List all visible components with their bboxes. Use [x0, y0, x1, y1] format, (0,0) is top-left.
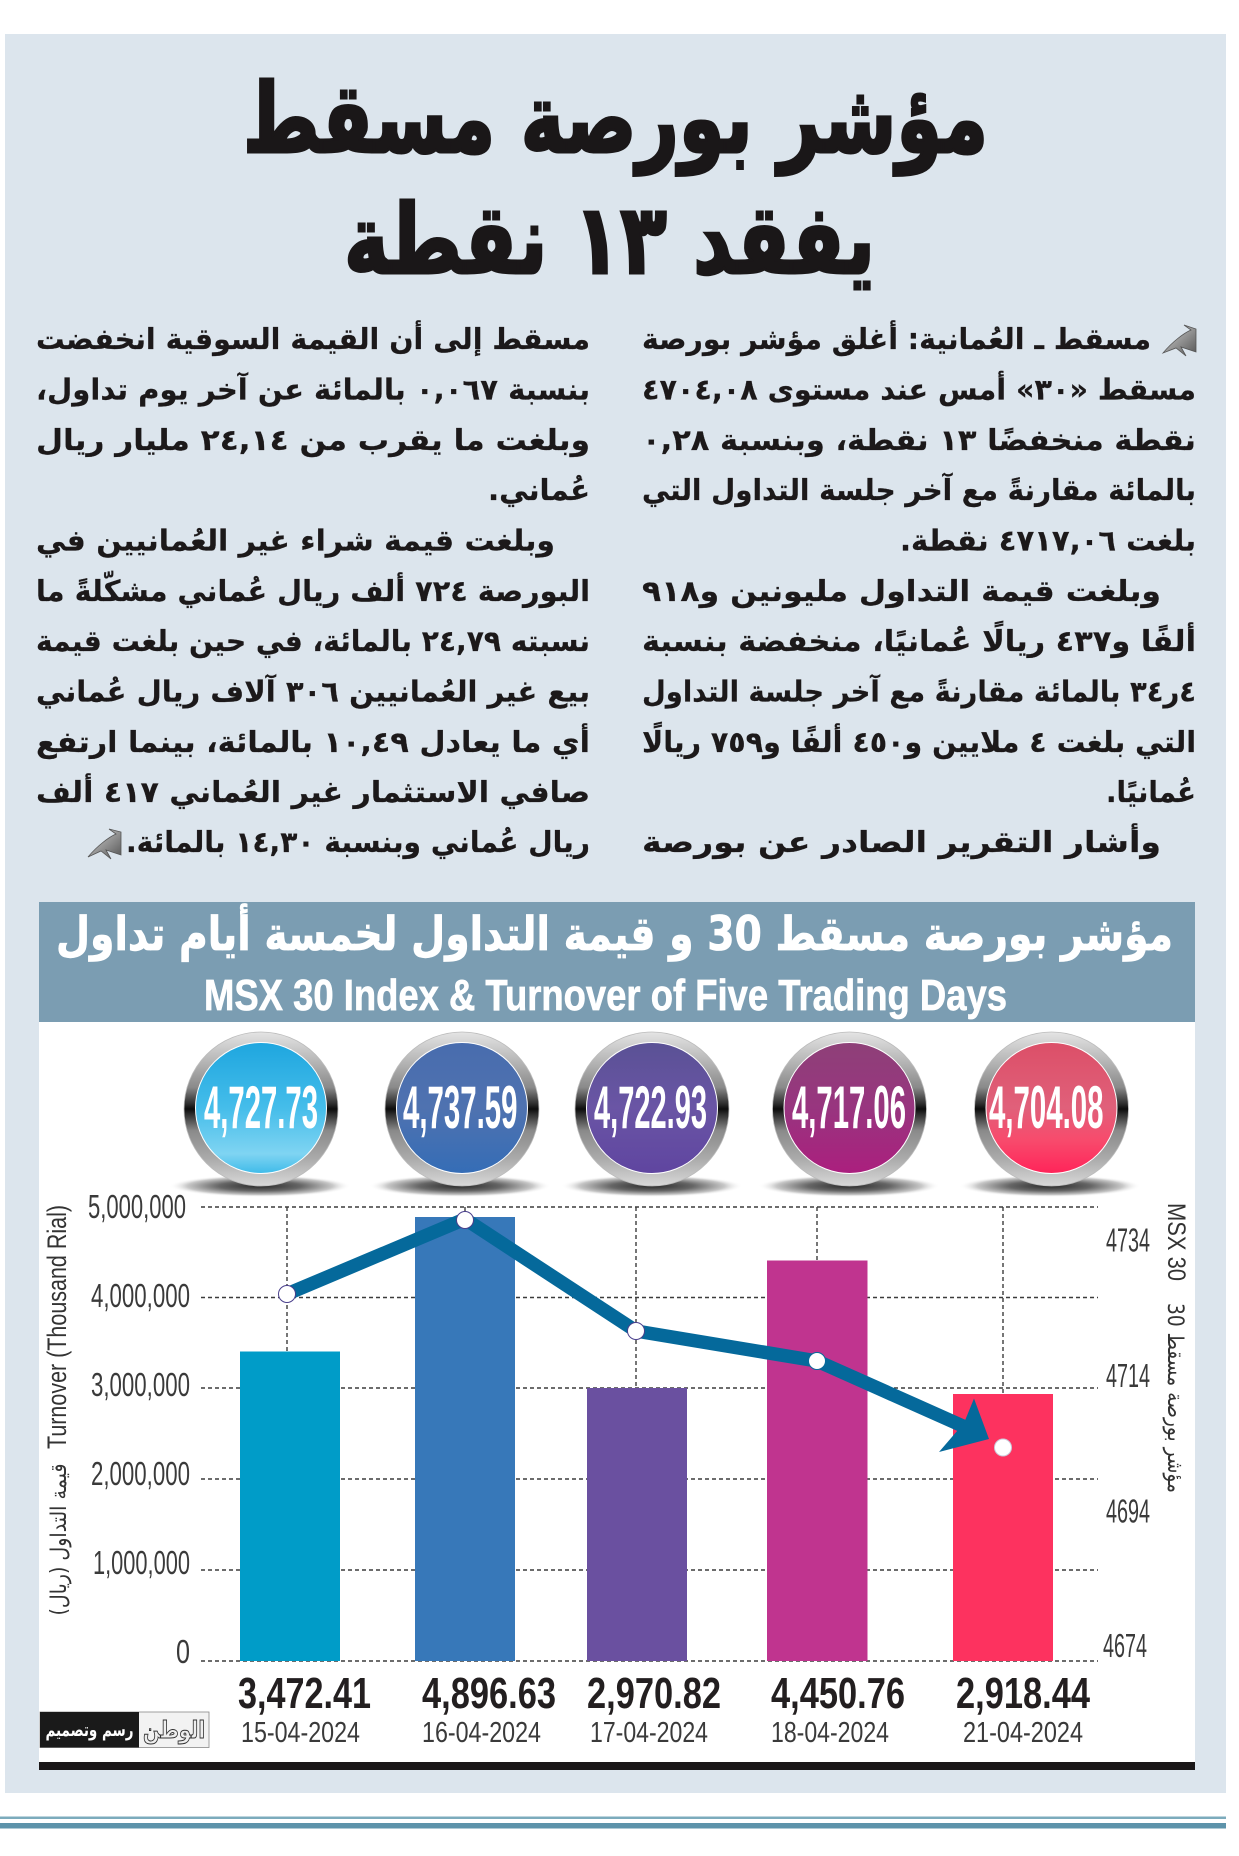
- text column: left: صافي الاستثمار غير العُماني ٤١٧ ألف: [36, 773, 590, 809]
- badge: 21-04-2024: [959, 1032, 1141, 1197]
- text column: right: بالمائة مقارنةً مع آخر جلسة التداول التي: [642, 472, 1196, 507]
- badge: 21-04-2024: 4,704.08: [989, 1074, 1104, 1141]
- text column: left: البورصة ٧٢٤ ألف ريال عُماني مشكّلةً ما: [36, 571, 590, 608]
- right axis title: مؤشر بورصة مسقط 30: [1162, 1303, 1187, 1493]
- right axis labels: 4674: [1103, 1627, 1147, 1664]
- text column: right: بلغت ٤٧١٧,٠٦ نقطة.: [900, 524, 1196, 558]
- left axis labels: 5,000,000: [88, 1188, 186, 1225]
- turnover values: 2,970.82: [587, 1669, 721, 1718]
- left axis labels: [88, 1188, 190, 1670]
- text column: right: التي بلغت ٤ ملايين و٤٥٠ ألفًا و٧٥٩ ريالًا: [642, 722, 1196, 759]
- dates: [241, 1717, 1083, 1749]
- title: مؤشر بورصة مسقط: [243, 63, 988, 176]
- text column: left: [36, 320, 590, 859]
- panel: chart header: مؤشر بورصة مسقط 30 و قيمة التداول لخمسة أيام تداول: [56, 903, 1173, 962]
- left axis labels: 0: [176, 1633, 190, 1670]
- logo credit: الوطن: [143, 1716, 205, 1744]
- dates: 18-04-2024: [771, 1717, 889, 1749]
- dates: 21-04-2024: [963, 1717, 1083, 1749]
- title: يفقد ١٣ نقطة: [344, 184, 875, 296]
- text column: left: ريال عُماني وبنسبة ١٤,٣٠ بالمائة.: [126, 825, 590, 859]
- text column: right: [642, 320, 1196, 859]
- left axis labels: 1,000,000: [93, 1544, 190, 1581]
- dates: 17-04-2024: [590, 1717, 708, 1749]
- turnover values: 3,472.41: [238, 1669, 371, 1718]
- text column: right: ألفًا و٤٣٧ ريالًا عُمانيًا، منخفضة بنسبة: [642, 621, 1196, 658]
- footer double rule: [0, 1816, 1226, 1828]
- text column: left: مسقط إلى أن القيمة السوقية انخفضت: [36, 320, 590, 357]
- badge: 17-04-2024: 4,722.93: [594, 1074, 707, 1141]
- bars: [240, 1217, 1053, 1661]
- index badges: [169, 1032, 1141, 1197]
- text column: left: عُماني.: [488, 473, 590, 507]
- text column: left: أي ما يعادل ١٠,٤٩ بالمائة، بينما ارتفع: [36, 723, 590, 759]
- logo credit: رسم وتصميم: [46, 1720, 134, 1741]
- badge: 15-04-2024: 4,727.73: [204, 1074, 318, 1141]
- left axis title: Turnover (Thousand Rial): [42, 1205, 72, 1449]
- text column: right: وأشار التقرير الصادر عن بورصة: [642, 823, 1161, 859]
- title: [243, 63, 988, 296]
- left axis title: قيمة التداول (ريال): [47, 1464, 72, 1616]
- panel: chart header: [39, 902, 1195, 1022]
- right axis labels: 4694: [1106, 1492, 1150, 1530]
- badge: 18-04-2024: 4,717.06: [792, 1074, 906, 1141]
- chart: [42, 1188, 1190, 1749]
- left axis labels: 4,000,000: [91, 1277, 190, 1314]
- text column: right: مسقط «٣٠» أمس عند مستوى ٤٧٠٤,٠٨: [642, 370, 1196, 406]
- badge: 17-04-2024: [561, 1032, 743, 1197]
- badge: 16-04-2024: [369, 1032, 551, 1197]
- turnover values: 2,918.44: [956, 1669, 1090, 1718]
- right axis title: MSX 30: [1162, 1203, 1190, 1281]
- left axis labels: 3,000,000: [91, 1366, 190, 1403]
- chart bottom bar: [39, 1762, 1195, 1770]
- text column: right: ٤ر٣٤ بالمائة مقارنةً مع آخر جلسة التداول: [642, 674, 1196, 708]
- badge: 16-04-2024: 4,737.59: [403, 1074, 518, 1141]
- text column: right: نقطة منخفضًا ١٣ نقطة، وبنسبة ٠,٢٨: [642, 423, 1196, 457]
- text column: left: وبلغت قيمة شراء غير العُمانيين في: [36, 524, 555, 558]
- right axis labels: 4714: [1106, 1357, 1150, 1394]
- text column: right: عُمانيًا.: [1106, 775, 1196, 809]
- text column: right: وبلغت قيمة التداول مليونين و٩١٨: [642, 574, 1161, 608]
- right axis title: [1162, 1203, 1190, 1493]
- turnover values: [238, 1669, 1090, 1718]
- left axis title: [42, 1205, 72, 1616]
- text column: left: وبلغت ما يقرب من ٢٤,١٤ مليار ريال: [36, 423, 590, 457]
- text column: left: بيع غير العُمانيين ٣٠٦ آلاف ريال عُماني: [36, 674, 590, 708]
- text column: right: مسقط ـ العُمانية: أغلق مؤشر بورصة: [642, 320, 1151, 356]
- badge: 15-04-2024: [169, 1032, 351, 1197]
- right axis labels: [1103, 1222, 1150, 1664]
- dates: 16-04-2024: [422, 1717, 541, 1749]
- line series with arrow: [278, 1212, 1012, 1456]
- text column: left: بنسبة ٠,٠٦٧ بالمائة عن آخر يوم تداول،: [36, 372, 590, 406]
- logo credit: [40, 1712, 209, 1748]
- panel: chart header: MSX 30 Index & Turnover of Five Trading Days: [204, 971, 1007, 1020]
- icon: sail start marker: [1163, 325, 1196, 356]
- text column: left: نسبته ٢٤,٧٩ بالمائة، في حين بلغت قيمة: [36, 624, 590, 658]
- badge: 18-04-2024: [758, 1032, 940, 1197]
- turnover values: 4,896.63: [422, 1669, 556, 1718]
- turnover values: 4,450.76: [771, 1669, 905, 1718]
- left axis labels: 2,000,000: [91, 1455, 190, 1492]
- icon: sail end marker: [88, 829, 121, 859]
- panel: chart background: [39, 1022, 1195, 1762]
- dates: 15-04-2024: [241, 1717, 360, 1749]
- right axis labels: 4734: [1106, 1222, 1150, 1258]
